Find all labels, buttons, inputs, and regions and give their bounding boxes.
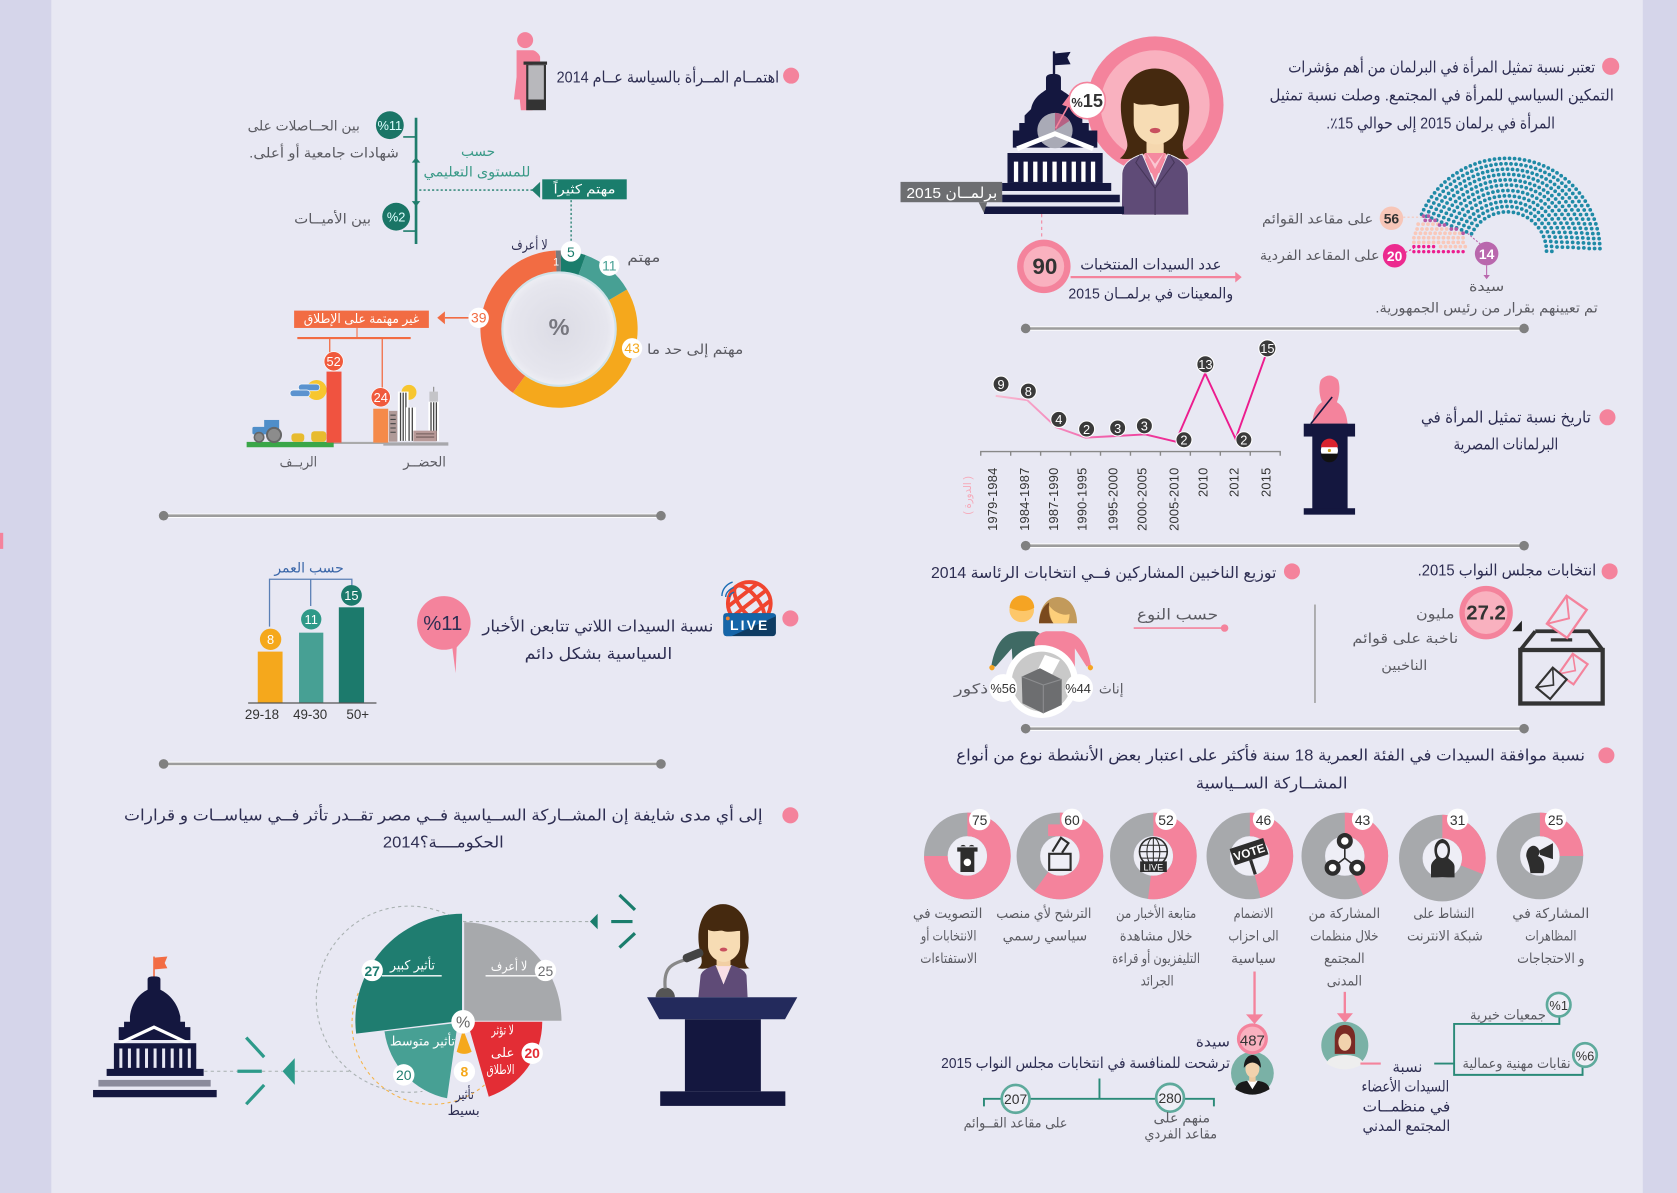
chart: line of representation by term: 2 <box>1180 433 1188 448</box>
donut: civil society 43: المشاركة من <box>1309 905 1380 922</box>
education breakdown tree: %11 <box>377 118 402 133</box>
stat: 90 women elected and appointed: 90 <box>1032 254 1057 279</box>
donut: internet activism 31: شبكة الانترنت <box>1407 927 1483 944</box>
heading: تاريخ نسبة تمثيل المرأة في <box>1421 407 1591 428</box>
icon: parliament building with flag <box>984 51 1124 214</box>
pie chart: influence levels: الاطلاق <box>487 1062 514 1078</box>
tree: candidates by seat type: على مقاعد القــوائم <box>964 1115 1067 1132</box>
stat: 487 women candidates: 487 <box>1240 1032 1265 1049</box>
stat bubble: 11 percent <box>417 596 471 673</box>
pie chart: influence levels: 25 <box>538 963 553 979</box>
bar chart: by age: 49-30 <box>293 707 327 722</box>
icon: man and woman with ballot box: %56 <box>990 681 1016 696</box>
donut: voting 75: الانتخابات أو <box>920 926 976 944</box>
panel: women's approval of types of political participation <box>913 744 1614 1142</box>
education breakdown tree: حسب <box>461 143 495 159</box>
label: by gender: حسب النوع <box>1137 607 1218 624</box>
stat: 27.2 million voters: 27.2 <box>1466 603 1506 625</box>
stat: 90 women elected and appointed: عدد السيدات المنتخبات <box>1080 257 1221 274</box>
callout: not interested at all <box>294 311 468 328</box>
chart: line of representation by term: 4 <box>1055 412 1062 427</box>
label: 20 individual seats: 20 <box>1387 248 1403 264</box>
donut: protests 25: المظاهرات <box>1525 927 1576 944</box>
stat: 90 women elected and appointed <box>1017 214 1242 304</box>
donut: joining parties 46: 46 <box>1256 812 1272 828</box>
label: 14 appointed women: سيدة <box>1469 278 1504 294</box>
pie chart: influence levels: % <box>456 1014 470 1032</box>
donut chart: interest levels: % <box>549 314 570 340</box>
chart: parliament seats hemicycle <box>1414 158 1600 252</box>
chart: line of representation by term: 2005-2010 <box>1167 468 1182 531</box>
label: by gender <box>1134 607 1228 632</box>
icon: live broadcast globe: LIVE <box>730 617 769 633</box>
donut: candidacy 60: 60 <box>1064 812 1080 828</box>
stat: 27.2 million voters: الناخبين <box>1381 657 1427 674</box>
heading with podium icon: اهتمــام المــرأة بالسياسة عــام 2014 <box>557 66 779 87</box>
tree: civil society membership: جمعيات خيرية <box>1470 1007 1546 1024</box>
arrow: parties to candidates <box>1246 972 1263 1024</box>
tree: civil society membership <box>1321 993 1597 1136</box>
badge: 15 percent: %15 <box>1071 91 1103 111</box>
tree: civil society membership: نسبة <box>1393 1059 1422 1076</box>
pie chart: influence levels: تأثير متوسط <box>390 1032 456 1049</box>
panel: history of women's representation <box>962 340 1616 531</box>
tree: civil society membership: نقابات مهنية وعمالية <box>1463 1055 1571 1072</box>
badge: 15 percent <box>1056 82 1105 128</box>
panel: women's share of parliament 2015 <box>901 36 1619 316</box>
chart: line of representation by term: 2010 <box>1195 468 1210 497</box>
label: 14 appointed women: 14 <box>1479 246 1495 262</box>
donut: following news 52: LIVE <box>1144 862 1163 872</box>
icon: live broadcast globe <box>719 573 779 636</box>
donut: following news 52: 52 <box>1158 812 1174 828</box>
donut: candidacy 60: الترشح لأي منصب <box>996 904 1091 922</box>
donut chart: interest levels: 1 <box>553 256 559 268</box>
donut chart: interest levels: لا أعرف <box>511 235 548 253</box>
stat: 487 women candidates: ترشحت للمنافسة في انتخابات مجلس النواب 2015 <box>941 1055 1230 1073</box>
donut: following news 52 <box>1112 809 1200 989</box>
donut chart: interest levels: 11 <box>602 258 617 274</box>
pie chart: influence levels: 20 <box>524 1045 540 1061</box>
label: 14 appointed women: تم تعيينهم بقرار من رئيس الجمهورية. <box>1375 299 1598 316</box>
tree: civil society membership: %6 <box>1576 1048 1594 1063</box>
chart: line of representation by term: 1979-1984 <box>985 468 1000 531</box>
chart: line of representation by term: 8 <box>1025 384 1032 399</box>
donut chart: interest levels: مهتم إلى حد ما <box>647 341 743 358</box>
education breakdown tree: للمستوى التعليمي <box>424 164 530 181</box>
stat: 27.2 million voters <box>1352 586 1522 674</box>
stat: 90 women elected and appointed: والمعينات في برلمــان 2015 <box>1068 286 1233 304</box>
panel: perceived influence on government policy <box>93 804 798 1118</box>
donut chart: interest levels <box>469 235 743 399</box>
donut: voting 75: الاستفتاءات <box>920 950 977 966</box>
donut: civil society 43: المدنى <box>1327 972 1362 988</box>
donut: joining parties 46: الى احزاب <box>1228 927 1279 944</box>
bar chart: by age: حسب العمر <box>273 559 344 576</box>
pie chart: influence levels: بسيط <box>448 1102 480 1118</box>
tree: candidates by seat type: 207 <box>1004 1091 1027 1107</box>
label: 56 list seats: على مقاعد القوائم <box>1262 211 1373 228</box>
donut: following news 52: متابعة الأخبار من <box>1116 904 1196 922</box>
tree: civil society membership: %1 <box>1549 998 1568 1013</box>
heading: المشــاركة الســياسية <box>1196 775 1348 794</box>
donut: protests 25: المشاركة في <box>1512 905 1589 922</box>
label: parliament 2015: برلمــان 2015 <box>906 185 997 202</box>
chart: line of representation by term: 1987-1990 <box>1046 468 1061 531</box>
donut: candidacy 60: سياسي رسمي <box>1003 927 1087 944</box>
donut: following news 52: الجرائد <box>1141 972 1174 989</box>
bar chart: rural vs urban: 52 <box>327 354 341 369</box>
education breakdown tree: بين الحــاصلات على <box>248 118 360 135</box>
pie chart: influence levels: تأثير كبير <box>389 956 435 973</box>
chart: line of representation by term: 2012 <box>1227 468 1241 497</box>
tree: civil society membership: المجتمع المدني <box>1363 1118 1450 1136</box>
bar chart: by age: 11 <box>305 612 318 627</box>
donut: following news 52: خلال مشاهدة <box>1120 927 1193 943</box>
bar chart: by age: 15 <box>344 588 359 603</box>
donut: joining parties 46: VOTE <box>1232 842 1267 864</box>
label: 56 list seats: 56 <box>1384 211 1399 227</box>
donut: protests 25: و الاحتجاجات <box>1517 950 1584 967</box>
education breakdown tree <box>248 111 530 244</box>
chart: line of representation by term: 13 <box>1198 357 1212 372</box>
donut chart: interest levels: 5 <box>567 244 575 260</box>
bar chart: rural vs urban: الريــف <box>280 453 317 471</box>
tree: candidates by seat type <box>964 1079 1217 1142</box>
donut: following news 52: التليفزيون أو قراءة <box>1112 949 1200 967</box>
icon: man and woman with ballot box: %44 <box>1065 681 1091 696</box>
bullet and intro text <box>1270 57 1619 133</box>
chart: line of representation by term: 1995-2000 <box>1106 468 1121 531</box>
icon: woman speaking at podium <box>647 904 797 1106</box>
callout: not interested at all: غير مهتمة على الإطلاق <box>304 311 420 327</box>
tree: candidates by seat type: منهم على <box>1153 1109 1210 1126</box>
donut: protests 25 <box>1508 809 1589 967</box>
arrow: pie to government <box>204 1038 352 1104</box>
chart: line of representation by term: 15 <box>1260 341 1275 356</box>
donut chart: interest levels: 43 <box>624 340 640 356</box>
donut: civil society 43 <box>1309 809 1380 988</box>
pie chart: influence levels: تأثير <box>455 1085 474 1103</box>
chart: line of representation by term: 2000-2005 <box>1135 468 1150 531</box>
label: 56 list seats <box>1262 207 1424 230</box>
icon: woman in pink circle <box>1087 36 1224 215</box>
donut: civil society 43: خلال منظمات <box>1310 927 1379 943</box>
chart: line of representation by term: 1990-1995 <box>1075 468 1090 531</box>
stat bubble: 11 percent: %11 <box>423 613 462 635</box>
icon: man and woman with ballot box: ذكور <box>953 680 988 697</box>
tree: candidates by seat type: 280 <box>1158 1090 1182 1106</box>
education breakdown tree: بين الأميــات <box>294 210 371 228</box>
bar chart: by age: 29-18 <box>245 707 279 722</box>
panel: women following political news <box>245 559 798 722</box>
stat: 487 women candidates: سيدة <box>1196 1033 1230 1049</box>
icon: man and woman with ballot box: إناث <box>1099 680 1124 697</box>
pie chart: influence levels: لا تؤثر <box>491 1023 514 1039</box>
callout: very interested <box>419 179 627 243</box>
education breakdown tree: %2 <box>387 209 405 224</box>
tree: civil society membership: السيدات الأعضاء <box>1361 1076 1449 1095</box>
panel: women's interest in politics 2014 <box>247 32 799 471</box>
label: 20 individual seats <box>1260 244 1414 267</box>
chart: line of representation by term <box>962 340 1280 531</box>
chart: line of representation by term: 2 <box>1083 422 1090 437</box>
chart: line of representation by term: 3 <box>1141 419 1148 434</box>
heading: انتخابات مجلس النواب 2015. <box>1418 562 1596 581</box>
icon: woman at podium with Egyptian flag <box>1304 376 1355 515</box>
pie chart: influence levels <box>316 906 561 1118</box>
bar chart: rural vs urban: الحضــر <box>402 453 446 471</box>
panel: 2015 House elections voters <box>1315 562 1618 703</box>
pie chart: influence levels: لا أعرف <box>491 957 527 974</box>
icon: urban scene <box>389 385 439 442</box>
stat: 27.2 million voters: ناخبة على قوائم <box>1352 630 1458 647</box>
chart: line of representation by term: 1984-1987 <box>1017 468 1032 531</box>
icon: government building <box>93 957 217 1097</box>
heading: الحكومــــة؟2014 <box>383 833 504 852</box>
pie chart: influence levels: على <box>491 1045 514 1060</box>
donut: candidacy 60 <box>996 809 1091 944</box>
donut: internet activism 31: 31 <box>1450 812 1466 828</box>
bar chart: by age: 50+ <box>346 707 369 722</box>
education breakdown tree: شهادات جامعية أو أعلى. <box>249 143 399 161</box>
heading <box>956 744 1614 794</box>
donut: internet activism 31 <box>1407 809 1483 944</box>
donut: voting 75 <box>913 809 999 966</box>
tree: candidates by seat type: مقاعد الفردي <box>1144 1125 1217 1142</box>
donut: protests 25: 25 <box>1548 812 1564 828</box>
bullet and intro text: التمكين السياسي للمرأة في المجتمع. وصلت نسبة تمثيل <box>1270 85 1614 106</box>
donut: civil society 43: 43 <box>1355 812 1371 828</box>
heading: نسبة السيدات اللاتي تتابعن الأخبار <box>481 615 713 636</box>
heading: إلى أي مدى شايفة إن المشــاركة الســياسية فــي مصر تقــدر تأثر فــي سياســات و قرارات <box>124 804 763 826</box>
label: 20 individual seats: على المقاعد الفردية <box>1260 247 1380 264</box>
donut: joining parties 46: سياسية <box>1231 950 1276 966</box>
pie chart: influence levels: 20 <box>396 1067 412 1083</box>
heading: توزيع الناخبين المشاركين فــي انتخابات الرئاسة 2014 <box>931 564 1276 583</box>
bar chart: rural vs urban <box>247 328 448 471</box>
donut chart: interest levels: 39 <box>471 310 487 326</box>
heading <box>481 610 798 663</box>
heading with podium icon <box>514 32 799 110</box>
donut chart: interest levels: مهتم <box>627 249 660 266</box>
donut: joining parties 46: الانضمام <box>1234 905 1273 921</box>
bar chart: by age: 8 <box>267 632 274 647</box>
donut: internet activism 31: النشاط على <box>1413 905 1474 921</box>
stat: 27.2 million voters: مليون <box>1416 605 1455 622</box>
bar chart: by age <box>245 559 376 722</box>
donut: joining parties 46 <box>1218 809 1281 966</box>
pie chart: influence levels: 8 <box>461 1063 469 1079</box>
icon: man and woman with ballot box <box>953 595 1124 718</box>
icon: rural scene <box>247 380 334 447</box>
bullet and intro text: المرأة في برلمان 2015 إلى حوالي 15٪. <box>1326 112 1555 133</box>
chart: line of representation by term: 9 <box>997 377 1005 392</box>
callout: very interested: مهتم كثيراً <box>553 180 616 198</box>
tree: civil society membership: في منظمــات <box>1363 1099 1450 1117</box>
donut: voting 75: 75 <box>972 812 988 828</box>
chart: line of representation by term: 2 <box>1240 433 1247 448</box>
heading <box>124 804 798 852</box>
bar chart: rural vs urban: 24 <box>374 390 388 405</box>
pie chart: influence levels: 27 <box>364 963 380 979</box>
stat: 487 women candidates <box>941 1023 1274 1095</box>
panel: 2014 presidential voters by gender <box>931 563 1300 718</box>
icon: ballot box with envelopes <box>1520 596 1603 703</box>
donut: civil society 43: المجتمع <box>1324 950 1365 967</box>
arrow: speaker to pie <box>463 895 635 948</box>
heading: نسبة موافقة السيدات في الفئة العمرية 18 سنة فأكثر على اعتبار بعض الأنشطة نوع من أنواع <box>956 744 1585 766</box>
chart: line of representation by term: ( الدورة ) <box>962 476 974 515</box>
arrow: civil society to members <box>1337 992 1353 1023</box>
bullet and intro text: تعتبر نسبة تمثيل المرأة في البرلمان من أهم مؤشرات <box>1288 57 1595 78</box>
heading: السياسية بشكل دائم <box>525 645 672 663</box>
chart: line of representation by term: 2015 <box>1259 468 1274 497</box>
heading <box>1421 407 1616 454</box>
chart: line of representation by term: 3 <box>1114 421 1121 436</box>
label: parliament 2015 <box>901 182 1002 213</box>
donut: voting 75: التصويت في <box>913 905 982 922</box>
label: 14 appointed women <box>1375 233 1598 316</box>
heading: البرلمانات المصرية <box>1453 435 1558 454</box>
